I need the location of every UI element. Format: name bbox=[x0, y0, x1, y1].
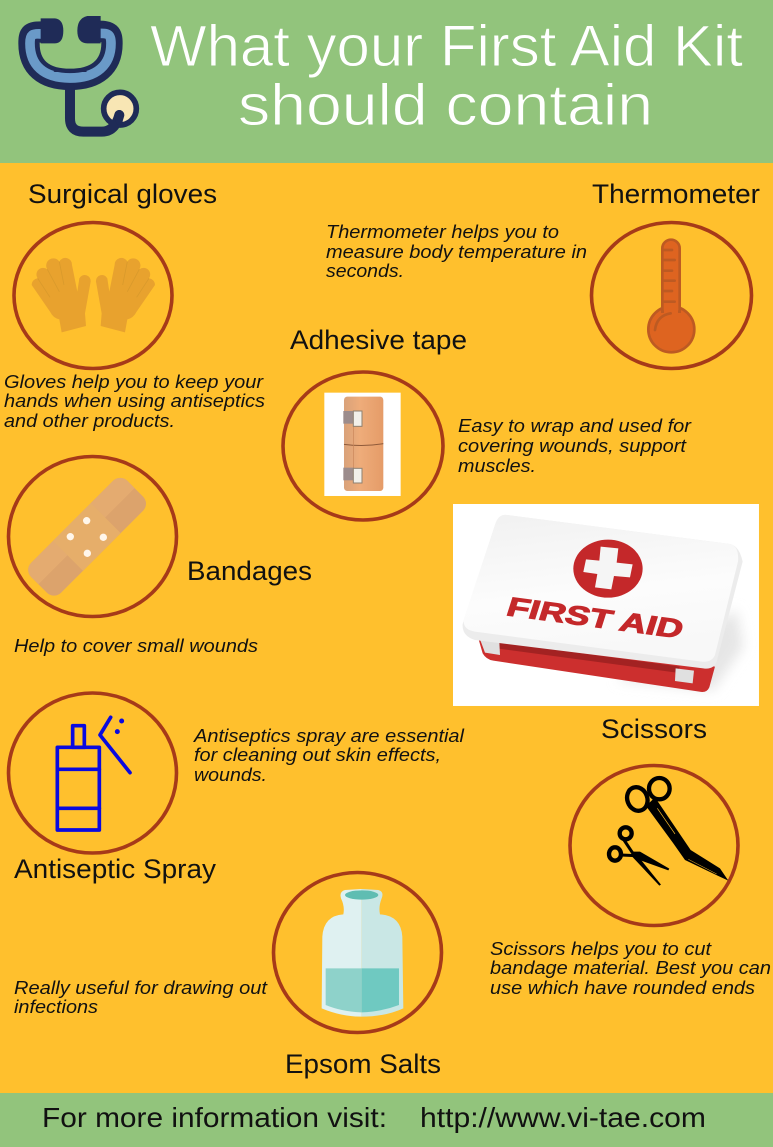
description: scissors bbox=[490, 938, 771, 998]
description: gloves bbox=[4, 371, 265, 431]
heading: epsom salts: Epsom Salts bbox=[285, 1049, 441, 1079]
icon ring: gloves bbox=[14, 222, 172, 368]
title: should contain bbox=[238, 73, 653, 138]
panel: epsom salts bbox=[14, 872, 442, 1079]
icon: scissors bbox=[609, 778, 728, 886]
description: scissors: Scissors helps you to cut bbox=[490, 938, 712, 959]
icon: tape roll bbox=[324, 393, 401, 496]
icon: gloves bbox=[32, 258, 155, 332]
icon: spray bottle bbox=[57, 717, 130, 830]
heading: thermometer: Thermometer bbox=[592, 179, 760, 209]
title bbox=[150, 14, 743, 138]
description: thermometer: seconds. bbox=[326, 260, 404, 281]
description: epsom salts: Really useful for drawing out bbox=[14, 977, 268, 998]
footer band bbox=[0, 1093, 773, 1147]
footer text bbox=[42, 1102, 706, 1133]
description: adhesive tape bbox=[458, 415, 692, 476]
bandage dots bbox=[67, 517, 107, 557]
description: thermometer: measure body temperature in bbox=[326, 241, 587, 262]
description: thermometer bbox=[326, 221, 587, 281]
icon: bandage bbox=[24, 474, 150, 600]
icon ring: adhesive tape bbox=[283, 372, 443, 520]
icon: stethoscope bbox=[29, 16, 136, 132]
description: gloves: and other products. bbox=[4, 410, 175, 431]
description: adhesive tape: muscles. bbox=[458, 455, 536, 476]
description: epsom salts: infections bbox=[14, 996, 98, 1017]
first aid kit photo bbox=[453, 504, 759, 706]
title: What your First Aid Kit bbox=[150, 14, 743, 79]
heading: surgical gloves: Surgical gloves bbox=[28, 179, 217, 209]
description: epsom salts bbox=[14, 977, 268, 1017]
first aid kit photo: FIRST AID bbox=[503, 592, 687, 644]
description: scissors: bandage material. Best you can bbox=[490, 957, 771, 978]
panel: scissors bbox=[490, 714, 771, 998]
icon ring: spray bbox=[8, 693, 176, 853]
description: antiseptic spray: Antiseptics spray are essential bbox=[193, 725, 465, 746]
panel: antiseptic spray bbox=[8, 693, 465, 884]
footer text: For more information visit: bbox=[42, 1102, 387, 1133]
description: thermometer: Thermometer helps you to bbox=[326, 221, 559, 242]
panel: bandages bbox=[8, 456, 312, 656]
panel: thermometer bbox=[326, 179, 760, 368]
heading: antiseptic spray: Antiseptic Spray bbox=[14, 854, 217, 884]
description: adhesive tape: Easy to wrap and used for bbox=[458, 415, 692, 436]
heading: bandages: Bandages bbox=[187, 556, 312, 586]
footer text: http://www.vi-tae.com bbox=[420, 1102, 706, 1133]
icon: thermometer bbox=[648, 240, 694, 352]
icon: bottle bbox=[322, 889, 403, 1017]
description: antiseptic spray bbox=[193, 725, 465, 785]
icon ring: bandages bbox=[8, 456, 176, 616]
icon ring: thermometer bbox=[592, 222, 752, 368]
description: antiseptic spray: for cleaning out skin effects, bbox=[194, 744, 441, 765]
header band bbox=[0, 0, 773, 163]
description: gloves: Gloves help you to keep your bbox=[4, 371, 264, 392]
icon ring: scissors bbox=[570, 766, 738, 926]
panel: surgical gloves bbox=[4, 179, 265, 431]
heading: adhesive tape: Adhesive tape bbox=[290, 325, 467, 355]
icon ring: epsom salts bbox=[274, 872, 442, 1032]
description: adhesive tape: covering wounds, support bbox=[458, 435, 687, 456]
description: scissors: use which have rounded ends bbox=[490, 977, 755, 998]
description: bandages: Help to cover small wounds bbox=[14, 635, 258, 656]
description: gloves: hands when using antiseptics bbox=[4, 390, 265, 411]
description: antiseptic spray: wounds. bbox=[194, 764, 267, 785]
heading: scissors: Scissors bbox=[601, 714, 707, 744]
panel: adhesive tape bbox=[283, 325, 692, 520]
